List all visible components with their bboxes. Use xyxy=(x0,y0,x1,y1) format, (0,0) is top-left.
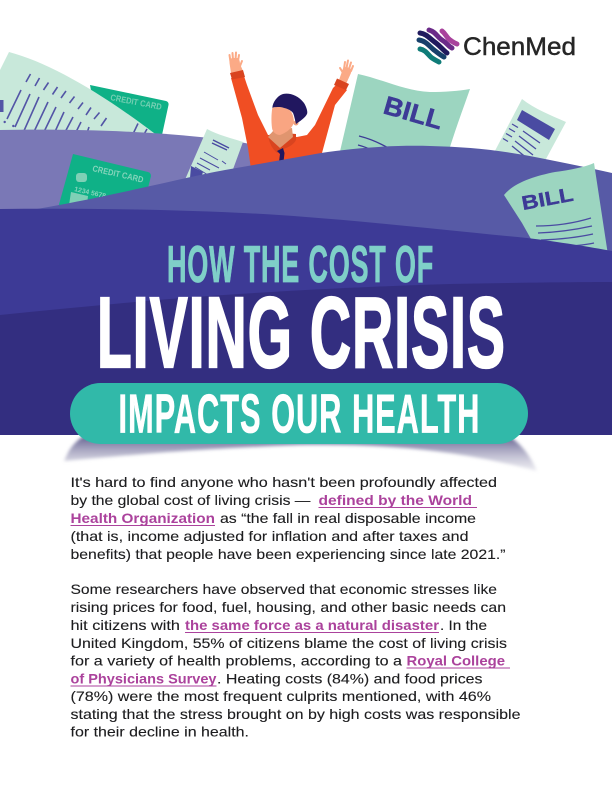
title xyxy=(70,236,528,444)
left hand xyxy=(229,52,243,73)
title pill xyxy=(70,383,528,444)
cuffs xyxy=(230,70,349,90)
text block: second paragraph: . In the xyxy=(440,617,487,633)
text block: intro paragraph: as “the fall in real disposable income xyxy=(220,510,476,526)
link: WHO definition: defined by the World xyxy=(318,492,472,508)
neck xyxy=(268,128,293,148)
text block: second paragraph: for a variety of health problems, according to a xyxy=(70,652,402,668)
card chip xyxy=(76,173,87,182)
logo wordmark: ChenMed xyxy=(463,33,576,61)
illustration: person with raised arms xyxy=(229,52,353,169)
text block: second paragraph xyxy=(70,581,521,740)
panel: back light purple wave xyxy=(0,130,262,215)
illustration: credit card on wave xyxy=(58,154,151,208)
text block: second paragraph: rising prices for food, fuel, housing, and other basic needs can xyxy=(70,599,506,615)
bill label: BILL xyxy=(380,90,446,135)
illustration: large receipt at left xyxy=(0,52,169,140)
text block: second paragraph: (78%) were the most frequent culprits mentioned, with 46% xyxy=(70,688,491,704)
illustration: BILL sheet in front xyxy=(504,163,608,255)
shadow under title pill xyxy=(64,435,537,471)
torso and arms xyxy=(231,76,347,169)
card label: CREDIT CARD xyxy=(110,92,163,112)
hair xyxy=(272,94,307,124)
link: WHO definition xyxy=(70,492,477,526)
text block: second paragraph: for their decline in health. xyxy=(70,724,249,740)
illustration: small receipt on wave xyxy=(184,129,243,182)
text block: second paragraph: hit citizens with xyxy=(70,617,180,633)
illustration: small receipt at right xyxy=(485,99,566,170)
link: Royal College survey: Royal College xyxy=(406,652,505,668)
panel: indigo wave xyxy=(0,209,612,330)
ear xyxy=(294,120,298,126)
text block: intro paragraph xyxy=(70,474,506,562)
card label: CREDIT CARD xyxy=(92,163,144,185)
link: natural disaster: the same force as a natural disaster xyxy=(185,617,440,633)
icon: wave mark xyxy=(419,30,457,62)
text block: intro paragraph: (that is, income adjusted for inflation and after taxes and xyxy=(70,528,468,544)
text block: intro paragraph: by the global cost of living crisis — xyxy=(70,492,310,508)
text block: intro paragraph: It's hard to find anyone who hasn't been profoundly affected xyxy=(70,474,497,490)
text block: second paragraph: Some researchers have observed that economic stresses like xyxy=(70,581,497,597)
link: WHO definition: Health Organization xyxy=(70,510,215,526)
right hand xyxy=(339,60,353,84)
panel: dark title wave xyxy=(0,282,612,435)
logo: ChenMed xyxy=(419,30,576,62)
text block: second paragraph: United Kingdom, 55% of citizens blame the cost of living crisis xyxy=(70,635,507,651)
card number: 1234 5678 xyxy=(74,186,107,200)
link: Royal College survey: of Physicians Survey xyxy=(70,670,217,686)
face xyxy=(271,107,294,135)
illustration: big BILL sheet xyxy=(338,74,470,160)
tie xyxy=(277,148,284,162)
text block: second paragraph: stating that the stress brought on by high costs was responsible xyxy=(70,706,521,722)
bill label: BILL xyxy=(520,184,575,215)
text block: intro paragraph: benefits) that people have been experiencing since late 2021.” xyxy=(70,546,506,562)
collar xyxy=(268,132,296,153)
link: Royal College survey xyxy=(70,652,510,686)
panel: middle purple wave xyxy=(0,146,612,270)
text block: second paragraph: . Heating costs (84%) and food prices xyxy=(217,670,482,686)
